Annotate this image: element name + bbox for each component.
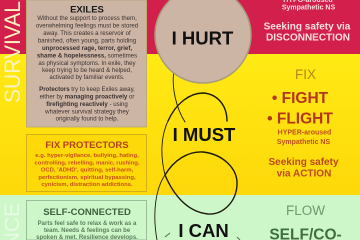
arrow: left chevron (165, 233, 170, 237)
arrow: right chevron (237, 237, 240, 240)
right column: hyper-aroused (277, 130, 331, 146)
exiles body text: Protectors try to keep Exiles away, (39, 86, 135, 93)
fix protectors body text: cynicism, distraction addictions. (41, 182, 133, 188)
panel: fix protectors (26, 134, 146, 192)
exiles body text: overwhelming feelings must be stored (36, 22, 138, 30)
swirl arrow line (155, 74, 237, 240)
heading: self-connected: SELF-CONNECTED (43, 207, 131, 218)
circle: i hurt: I HURT (172, 28, 234, 48)
exiles body text: originally found to help. (56, 116, 119, 122)
circle: i hurt (155, 0, 251, 83)
right column: seeking safety via action: Seeking safety (268, 157, 339, 168)
heading: fix protectors: FIX PROTECTORS (45, 140, 129, 151)
right column: seeking safety via action (268, 157, 339, 180)
fix protectors body text: e.g. hyper-vigilance, bullying, hating, (35, 153, 139, 159)
exiles body text: unprocessed rage, terror, grief, (42, 45, 132, 52)
right column: fight flight: • FLIGHT (267, 110, 333, 128)
exiles body text: keep trying to be heard & helped, (42, 67, 132, 74)
right column: fight flight (267, 90, 333, 128)
panel: self-connected (26, 200, 146, 240)
exiles body text: away. This creates a reservoir of (43, 30, 131, 37)
right column: disconnection: Sympathetic NS (282, 4, 335, 12)
fix protectors body text: controlling, rebelling, manic, rushing, (34, 160, 140, 166)
exiles body text: whatever survival strategy they (44, 108, 130, 116)
self-connected body text: Parts feel safe to relax & work as a (38, 221, 137, 227)
label: i must: I MUST (173, 124, 236, 145)
exiles body text: shame & hopelessness, sometimes (37, 52, 137, 60)
exiles body text: activated by familiar events. (49, 74, 125, 81)
right column: fix label: FIX (295, 67, 316, 82)
right column: disconnection: DISCONNECTION (266, 33, 350, 44)
right column: hyper-aroused: HYPER-aroused (278, 130, 331, 137)
exiles body text (36, 15, 138, 122)
exiles body text: banished, often young, parts holding (38, 38, 136, 44)
right column: flow label: FLOW (286, 203, 325, 218)
exiles body text: either by managing proactively or (40, 94, 134, 100)
right column: disconnection: Seeking safety via (264, 22, 351, 32)
heading: exiles: EXILES (70, 4, 104, 16)
right column: seeking safety via action: via ACTION (277, 169, 331, 180)
right column: hyper-aroused: Sympathetic NS (277, 139, 330, 146)
self-connected body text: team. Needs & feelings can be (44, 228, 131, 234)
right column: fight flight: • FIGHT (272, 90, 329, 107)
right column: disconnection (264, 0, 351, 44)
fix protectors body text: OCD, 'ADHD', quitting, self-harm, (41, 168, 134, 174)
exiles body text: Without the support to process them, (37, 15, 137, 22)
exiles body text: as physical symptoms. In exile, they (38, 60, 137, 67)
self-connected body text (36, 221, 138, 240)
fix protectors body text (34, 153, 140, 188)
exiles body text: firefighting reactively - using (46, 101, 128, 108)
fix protectors body text: perfectionism, spiritual bypassing, (38, 175, 136, 181)
panel: exiles (26, 0, 146, 127)
